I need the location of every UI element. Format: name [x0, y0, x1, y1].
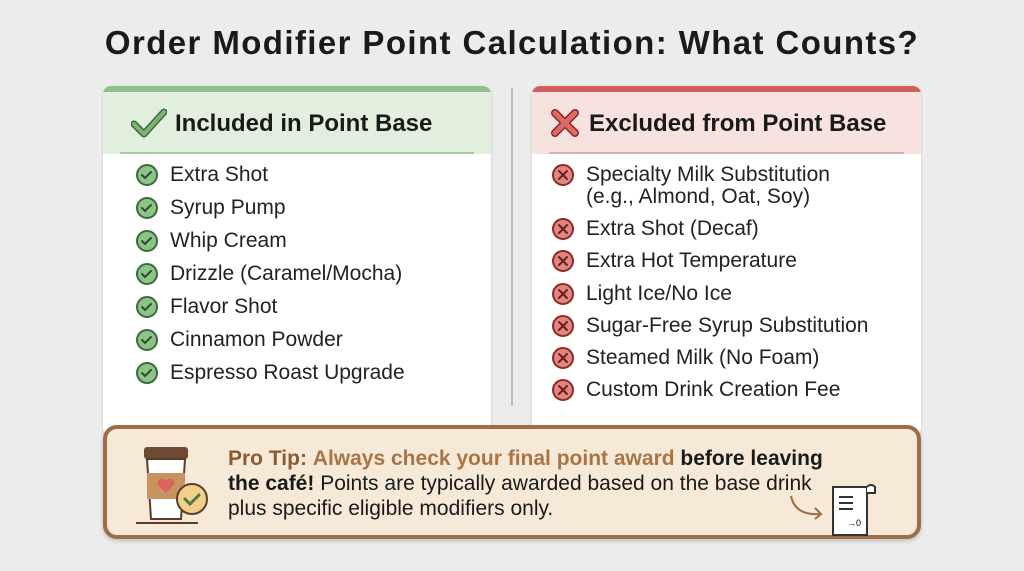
title: Order Modifier Point Calculation: What Counts? — [105, 24, 919, 61]
list: excluded: Steamed Milk (No Foam) — [586, 346, 819, 369]
list: excluded: Sugar-Free Syrup Substitution — [586, 314, 868, 337]
list: excluded: (e.g., Almond, Oat, Soy) — [586, 185, 810, 208]
list: included: Syrup Pump — [170, 196, 286, 219]
divider — [511, 88, 513, 406]
tip text: Pro Tip: Always check your final point award before leaving the café! Points are typically awarded based on the base drink plus specific eligible modifiers only. — [228, 447, 823, 520]
list: included: Extra Shot — [170, 163, 268, 186]
icon: coffee cup — [136, 447, 208, 524]
list: excluded: Specialty Milk Substitution — [586, 163, 830, 186]
list: excluded — [552, 163, 868, 401]
panel: included — [103, 86, 491, 436]
icon: arrow — [790, 496, 822, 520]
list: included: Drizzle (Caramel/Mocha) — [170, 262, 402, 285]
icon: receipt: →0 — [847, 518, 861, 528]
header: included: Included in Point Base — [175, 110, 432, 137]
list: included: Flavor Shot — [170, 295, 277, 318]
list: included: Cinnamon Powder — [170, 328, 343, 351]
list: excluded: Extra Shot (Decaf) — [586, 217, 759, 240]
panel: excluded — [532, 86, 921, 436]
list: excluded: Light Ice/No Ice — [586, 282, 732, 305]
header: included — [103, 86, 491, 154]
header: excluded — [532, 86, 921, 154]
icon: receipt — [832, 484, 876, 536]
list: included — [136, 163, 405, 384]
list: included: Espresso Roast Upgrade — [170, 361, 405, 384]
header: excluded: Excluded from Point Base — [589, 110, 886, 137]
list: included: Whip Cream — [170, 229, 287, 252]
list: excluded: Custom Drink Creation Fee — [586, 378, 840, 401]
list: excluded: Extra Hot Temperature — [586, 249, 797, 272]
callout: pro tip — [103, 425, 921, 539]
